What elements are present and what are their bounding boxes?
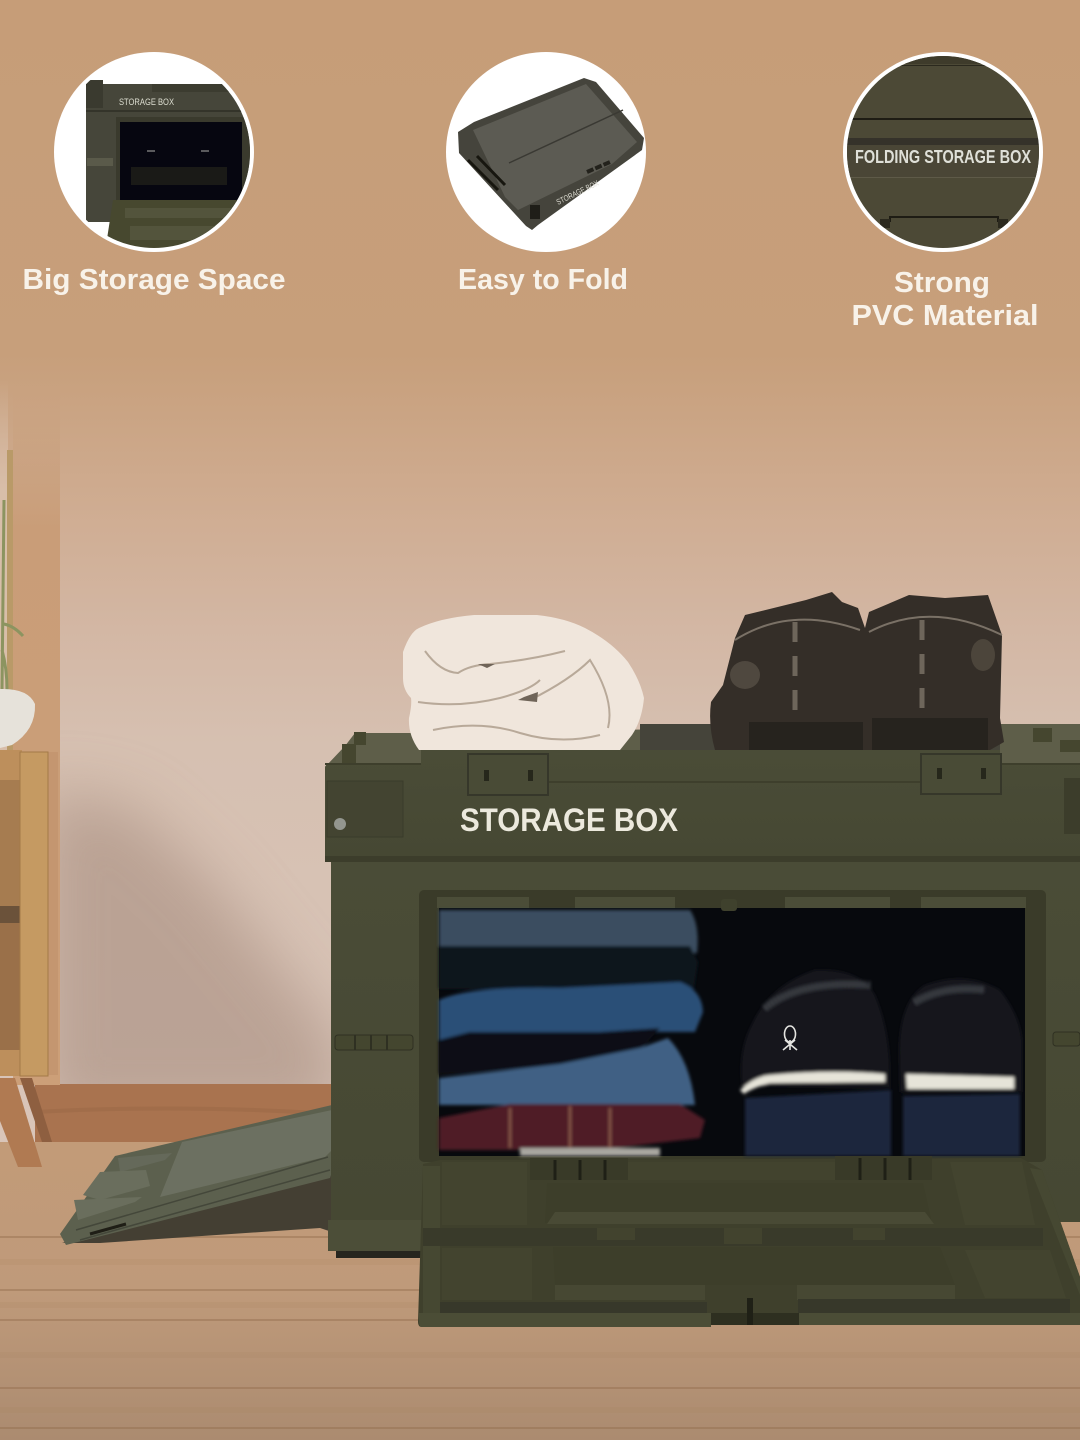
lid front band — [325, 750, 1080, 858]
box body — [325, 856, 1080, 862]
wall shadow — [60, 780, 331, 1084]
icon: box label close-up circle — [843, 52, 1043, 252]
pair of black leather shoes — [710, 592, 1004, 750]
wall background — [0, 0, 1080, 1145]
icon: box label close-up circle: FOLDING STORAGE BOX — [855, 147, 1031, 167]
label: Big Storage Space — [22, 264, 286, 296]
door lower recesses — [442, 1248, 532, 1300]
interior opening — [439, 899, 1025, 1156]
box label: STORAGE BOX — [460, 802, 679, 838]
hinges — [335, 1032, 1080, 1050]
door frame — [419, 890, 1046, 1162]
folded white towel — [403, 615, 644, 750]
feature: strong PVC material: PVC Material — [852, 300, 1038, 332]
feature: big storage space — [22, 52, 286, 296]
icon: open storage box circle: STORAGE BOX — [119, 97, 174, 107]
icon: folded box circle: STORAGE BOX — [555, 178, 601, 207]
clasps — [468, 754, 548, 795]
icon: shoe logo — [783, 1026, 797, 1050]
door bottom lip — [440, 1299, 1070, 1313]
wooden floor — [0, 1142, 1080, 1440]
icon: open storage box circle — [54, 52, 261, 252]
wooden side cabinet — [0, 750, 58, 1167]
black and white shoes — [740, 970, 1022, 1156]
feature: easy to fold — [446, 52, 646, 296]
icon: folded box circle — [446, 52, 646, 252]
wooden pillar at left — [0, 370, 60, 1085]
label: Strong — [894, 267, 990, 299]
box top lid surface — [326, 724, 1080, 766]
skirting board — [35, 1084, 335, 1142]
door middle rail — [423, 1228, 1043, 1246]
plant in white pot — [0, 500, 35, 748]
stacked jeans — [439, 910, 705, 1156]
storage box — [325, 750, 1080, 1327]
opened front door — [418, 1156, 1080, 1327]
open side lid on floor — [60, 1105, 332, 1245]
feature: strong PVC material — [843, 52, 1043, 332]
label: Easy to Fold — [458, 264, 628, 296]
